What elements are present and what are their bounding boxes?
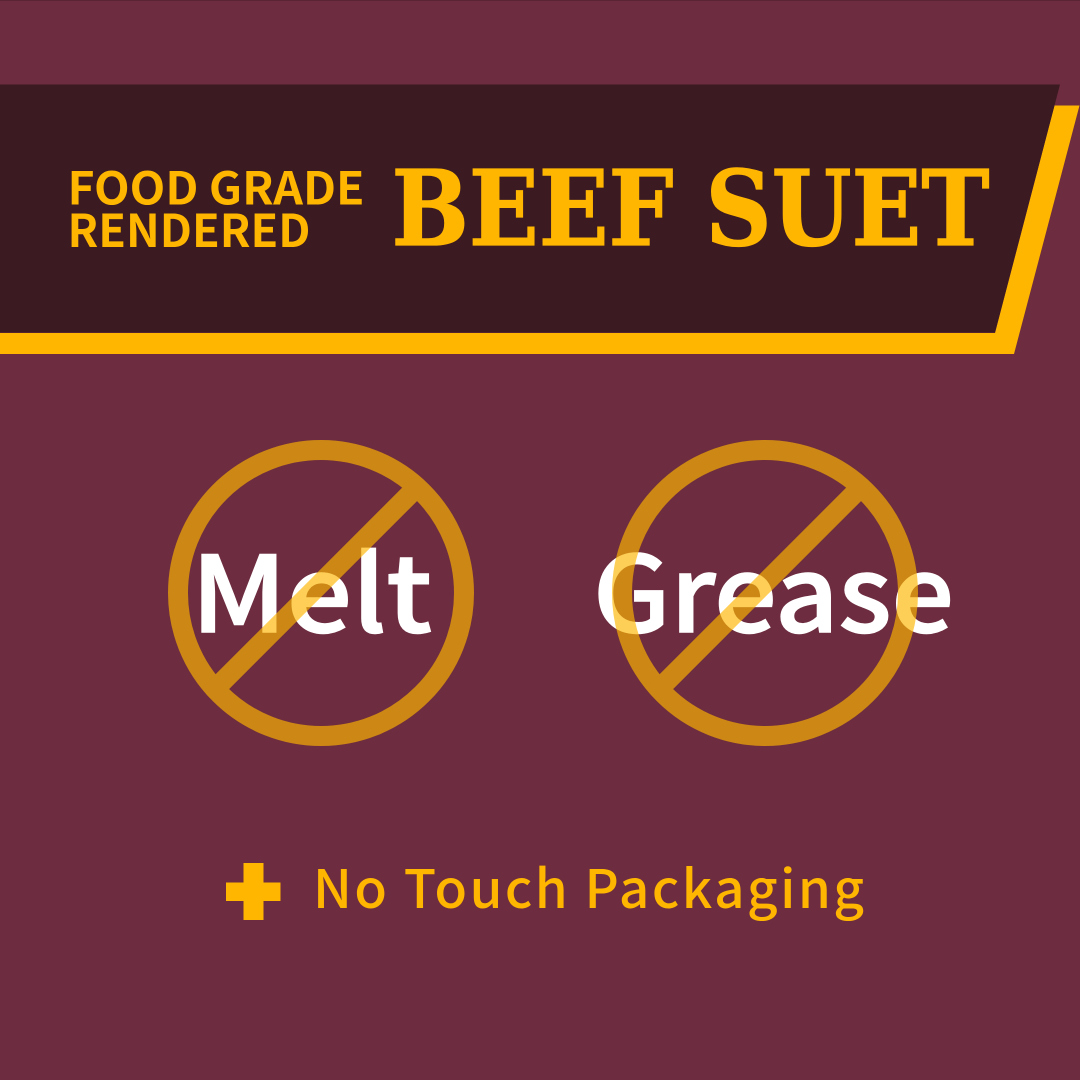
title: beef suet: BEEF SUET — [392, 147, 990, 270]
subtitle: food grade rendered: RENDERED — [68, 195, 310, 260]
word: melt: Melt — [191, 511, 432, 663]
icon: prohibition sign right — [622, 450, 908, 736]
caption: no touch packaging: No Touch Packaging — [313, 848, 864, 924]
subtitle: food grade rendered — [68, 152, 365, 260]
icon: prohibition sign left — [178, 450, 464, 736]
icon: plus — [226, 863, 280, 920]
banner — [0, 84, 1080, 354]
word: grease: Grease — [593, 511, 954, 663]
banner gold outline — [0, 106, 1080, 354]
banner dark panel — [0, 84, 1060, 332]
subtitle: food grade rendered: FOOD GRADE — [68, 152, 365, 218]
